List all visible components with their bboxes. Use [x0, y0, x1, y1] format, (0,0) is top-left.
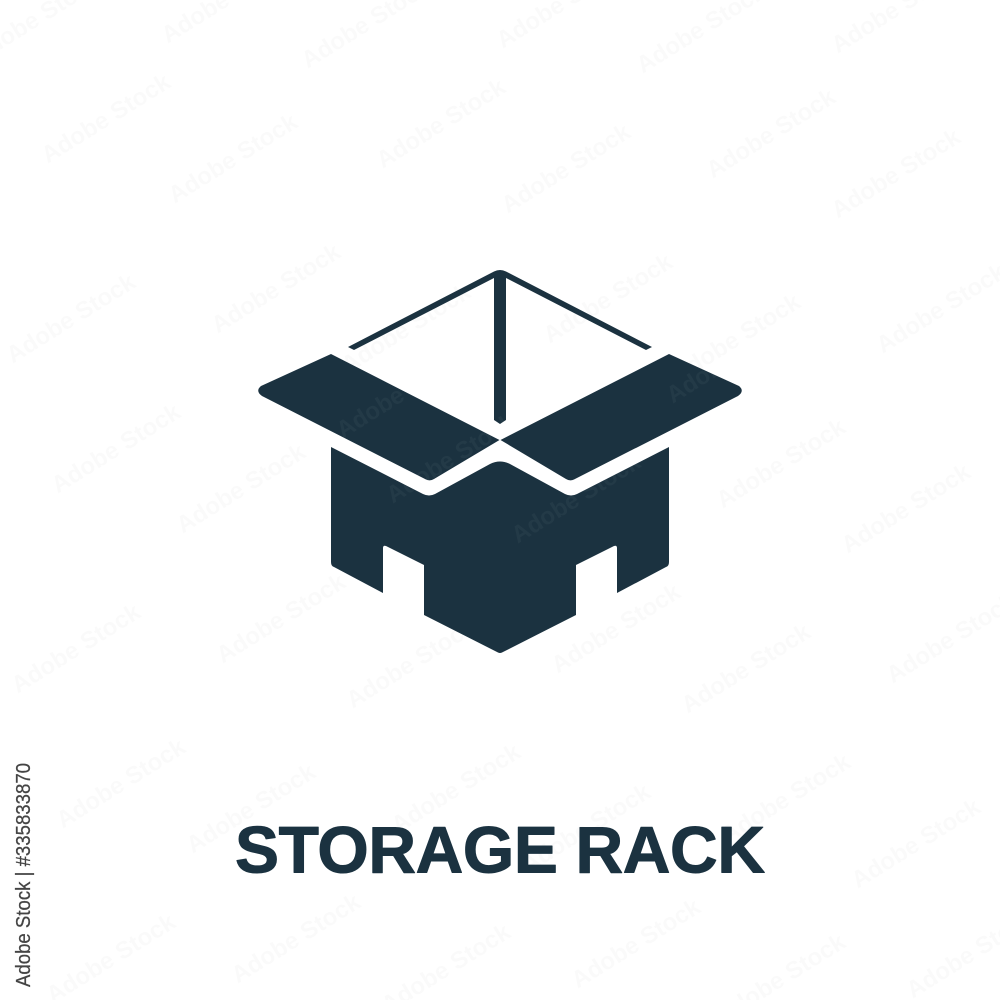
watermark pattern: Adobe Stock: [539, 248, 678, 349]
watermark pattern: Adobe Stock: [227, 888, 366, 989]
watermark pattern: Adobe Stock: [164, 108, 303, 209]
watermark pattern: Adobe Stock: [52, 733, 191, 834]
stock id side label: Adobe Stock | #335833870: [13, 763, 35, 987]
watermark pattern: Adobe Stock: [37, 68, 176, 169]
watermark pattern: Adobe Stock: [342, 613, 481, 714]
watermark pattern: Adobe Stock: [517, 778, 656, 879]
watermark pattern: Adobe Stock: [547, 578, 686, 679]
watermark pattern: Adobe Stock: [717, 748, 856, 849]
icon: open box: [258, 270, 742, 653]
icon: right flap: [500, 354, 742, 480]
watermark over icon: Adobe Stock: [507, 448, 646, 549]
watermark over icon: Adobe Stock: [382, 408, 521, 509]
icon: box body: [331, 447, 669, 653]
watermark pattern: Adobe Stock: [497, 118, 636, 219]
watermark pattern: Adobe Stock: [712, 413, 851, 514]
icon: left flap: [258, 354, 500, 480]
watermark over icon: Adobe Stock: [332, 343, 471, 444]
watermark pattern: Adobe Stock: [182, 758, 321, 859]
watermark pattern: Adobe Stock: [337, 278, 476, 379]
watermark pattern: Adobe Stock: [677, 618, 816, 719]
watermark over icon: Adobe Stock: [662, 308, 801, 409]
watermark pattern: Adobe Stock: [827, 123, 966, 224]
watermark pattern: Adobe Stock: [372, 73, 511, 174]
watermark pattern: Adobe Stock: [207, 238, 346, 339]
watermark over icon: [332, 308, 801, 549]
watermark pattern: Adobe Stock: [567, 893, 706, 994]
watermark pattern: Adobe Stock: [702, 83, 841, 184]
watermark pattern: Adobe Stock: [172, 438, 311, 539]
icon: box back outline: [348, 270, 652, 424]
watermark pattern: Adobe Stock: [7, 598, 146, 699]
watermark pattern: Adobe Stock: [47, 398, 186, 499]
title: STORAGE RACK: [235, 812, 765, 886]
watermark pattern: Adobe Stock: [2, 268, 141, 369]
watermark pattern: Adobe Stock: [212, 568, 351, 669]
watermark pattern: Adobe Stock: [837, 458, 976, 559]
watermark pattern: Adobe Stock: [847, 793, 986, 894]
watermark pattern: Adobe Stock: [387, 738, 526, 839]
watermark pattern: Adobe Stock: [667, 288, 806, 389]
